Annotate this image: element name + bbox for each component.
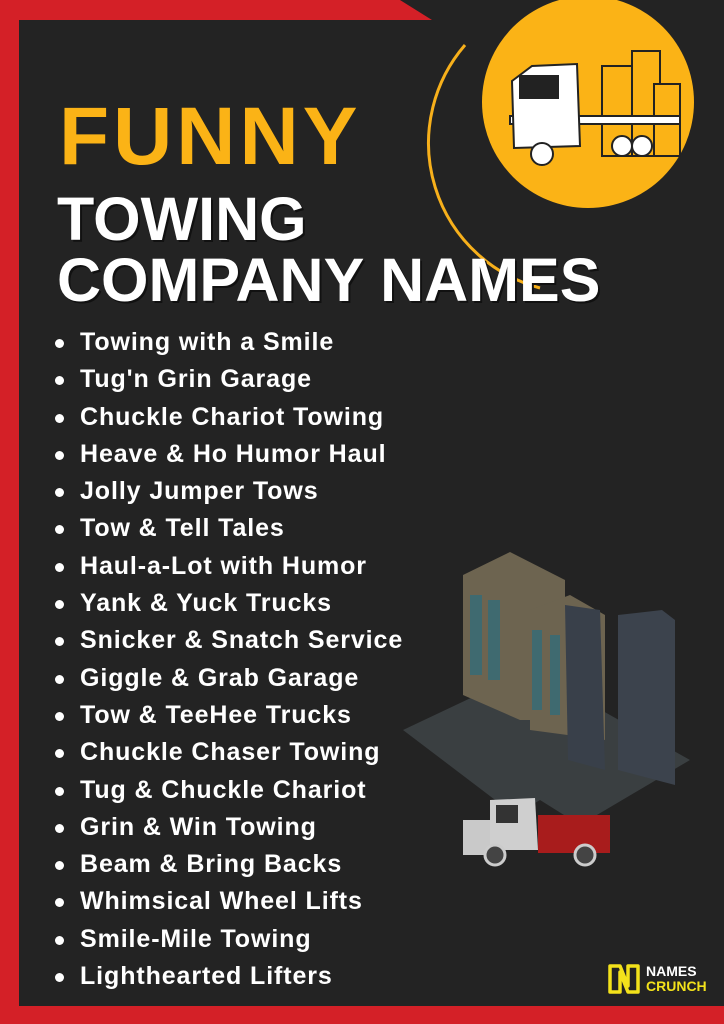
list of names: Grin & Win Towing — [80, 813, 317, 841]
logo: Names Crunch — [608, 963, 707, 994]
list of names: Tug & Chuckle Chariot — [80, 776, 367, 804]
list of names: Beam & Bring Backs — [80, 850, 342, 878]
yellow arc decoration — [426, 44, 540, 290]
illustration: red tow truck — [463, 798, 610, 866]
list of names: Smile-Mile Towing — [80, 925, 312, 953]
list of names — [55, 328, 403, 990]
title: TOWING COMPANY NAMES — [57, 185, 600, 314]
list of names: Jolly Jumper Tows — [80, 477, 319, 505]
list of names: Tug'n Grin Garage — [80, 365, 312, 393]
logo: Names Crunch: CRUNCH — [646, 978, 707, 994]
list of names: Chuckle Chariot Towing — [80, 403, 384, 431]
title: FUNNY: FUNNY — [59, 91, 361, 182]
list of names: Haul-a-Lot with Humor — [80, 552, 367, 580]
illustration: buildings — [403, 552, 690, 815]
list of names: Yank & Yuck Trucks — [80, 589, 332, 617]
list of names: Snicker & Snatch Service — [80, 626, 403, 654]
list of names: Giggle & Grab Garage — [80, 664, 359, 692]
list of names: Lighthearted Lifters — [80, 962, 333, 990]
list of names: Tow & Tell Tales — [80, 514, 285, 542]
list of names: Heave & Ho Humor Haul — [80, 440, 386, 468]
title: TOWING COMPANY NAMES: TOWING — [57, 185, 307, 253]
title: TOWING COMPANY NAMES: COMPANY NAMES — [57, 246, 600, 314]
icon: yellow circle with flatbed truck — [482, 0, 694, 208]
list of names: Chuckle Chaser Towing — [80, 738, 380, 766]
logo: Names Crunch: NAMES — [646, 963, 697, 979]
list of names: Towing with a Smile — [80, 328, 334, 356]
list of names: Tow & TeeHee Trucks — [80, 701, 352, 729]
list of names: Whimsical Wheel Lifts — [80, 887, 363, 915]
